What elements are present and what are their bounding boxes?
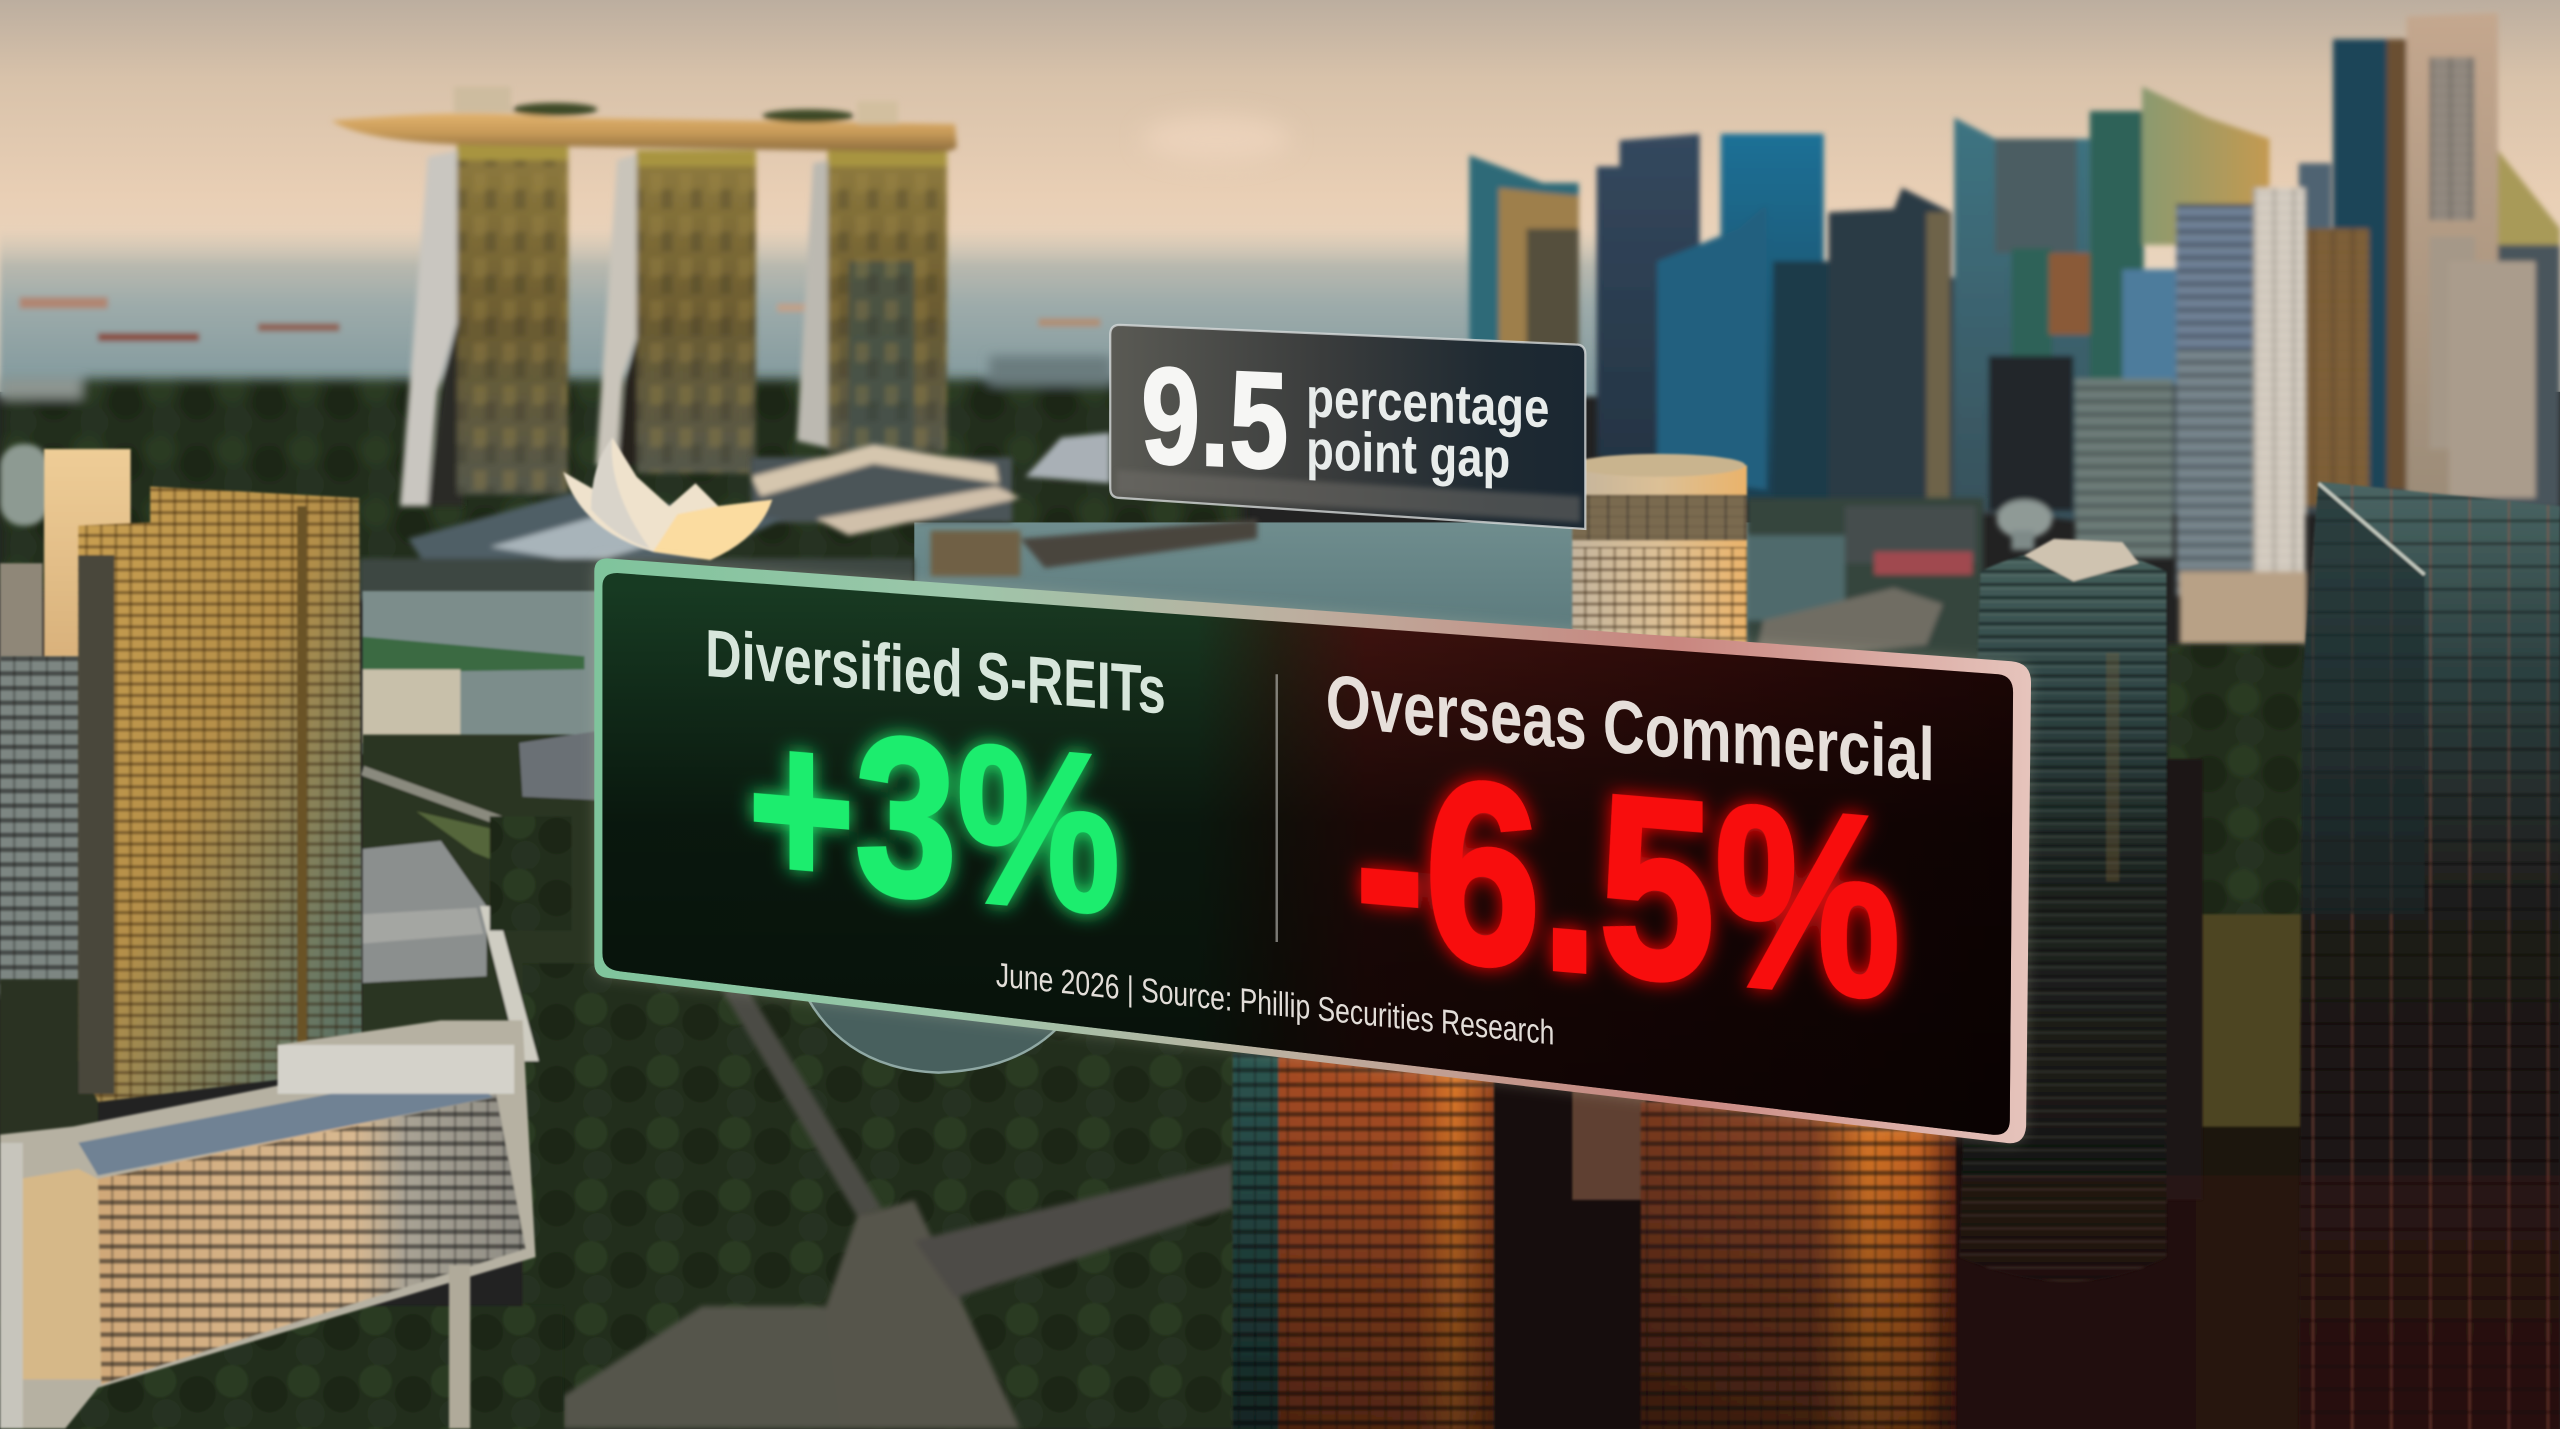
- divider between columns: [1276, 674, 1278, 942]
- foreground: grey residential block: [0, 656, 82, 999]
- background: green shoreline: [0, 356, 1241, 591]
- background: conference centre: [0, 433, 1257, 601]
- value: +3%: +3%: [748, 678, 1120, 961]
- background: waterfront right: [1747, 498, 2305, 922]
- foreground: orange tower left: [1233, 1053, 1494, 1429]
- landmark: Esplanade dome: [808, 999, 1071, 1073]
- foreground: left cream tower: [0, 449, 131, 669]
- background: sunset cloud: [1143, 116, 1290, 162]
- overlay: red glow on lower right: [1951, 1175, 2560, 1429]
- foreground: bottom-left trees: [0, 1306, 563, 1429]
- foreground: round glass tower: [1959, 539, 2202, 1282]
- landmark: ArtScience Museum lotus: [563, 438, 772, 560]
- building: cylinder tower: [1572, 454, 1747, 653]
- callout: 9.5 percentage point gap glass chip: [1110, 325, 1585, 529]
- label: point gap: point gap: [1306, 419, 1510, 490]
- skypark deck: [331, 87, 957, 152]
- figure: 9.5: 9.5: [1141, 339, 1288, 499]
- source note: June 2026 | Source: Phillip Securities Research: [996, 956, 1554, 1053]
- tower 1: [400, 144, 568, 506]
- value: -6.5%: -6.5%: [1355, 718, 1900, 1053]
- foreground: left channel and field: [362, 591, 607, 754]
- foreground: mid-ground plaza with trees: [362, 731, 1273, 1429]
- background: sky: [0, 0, 2560, 392]
- foreground: low-rise white building: [0, 1020, 536, 1429]
- column: Overseas Commercial: [1326, 659, 1935, 1053]
- foreground: orange tower right: [1641, 1102, 1956, 1429]
- panel: main comparison glass board: [594, 558, 2031, 1143]
- label: percentage: percentage: [1306, 366, 1549, 439]
- foreground: golden glass tower: [78, 487, 362, 1102]
- background: bay water: [914, 522, 1894, 718]
- background: sea and ships: [0, 229, 1633, 397]
- tower 2: [596, 150, 756, 473]
- landmark: Marina Bay Sands: [331, 87, 957, 506]
- foreground: large glass tower right: [2299, 482, 2560, 1429]
- tower 3: [797, 150, 947, 452]
- foreground: lower cylinder base: [1572, 1078, 1646, 1200]
- foreground: roads and junction: [563, 989, 1233, 1429]
- label: Overseas Commercial: Overseas Commercial: [1326, 659, 1935, 797]
- foreground: lower right ground: [1494, 914, 2310, 1429]
- skyline: financial district towers: [1469, 13, 2560, 645]
- label: Diversified S-REITs: Diversified S-REITs: [705, 616, 1166, 729]
- chip: blurred reflection band: [1117, 470, 1580, 522]
- column: Diversified S-REITs: [705, 616, 1166, 961]
- foreground: left tree base: [0, 980, 98, 1159]
